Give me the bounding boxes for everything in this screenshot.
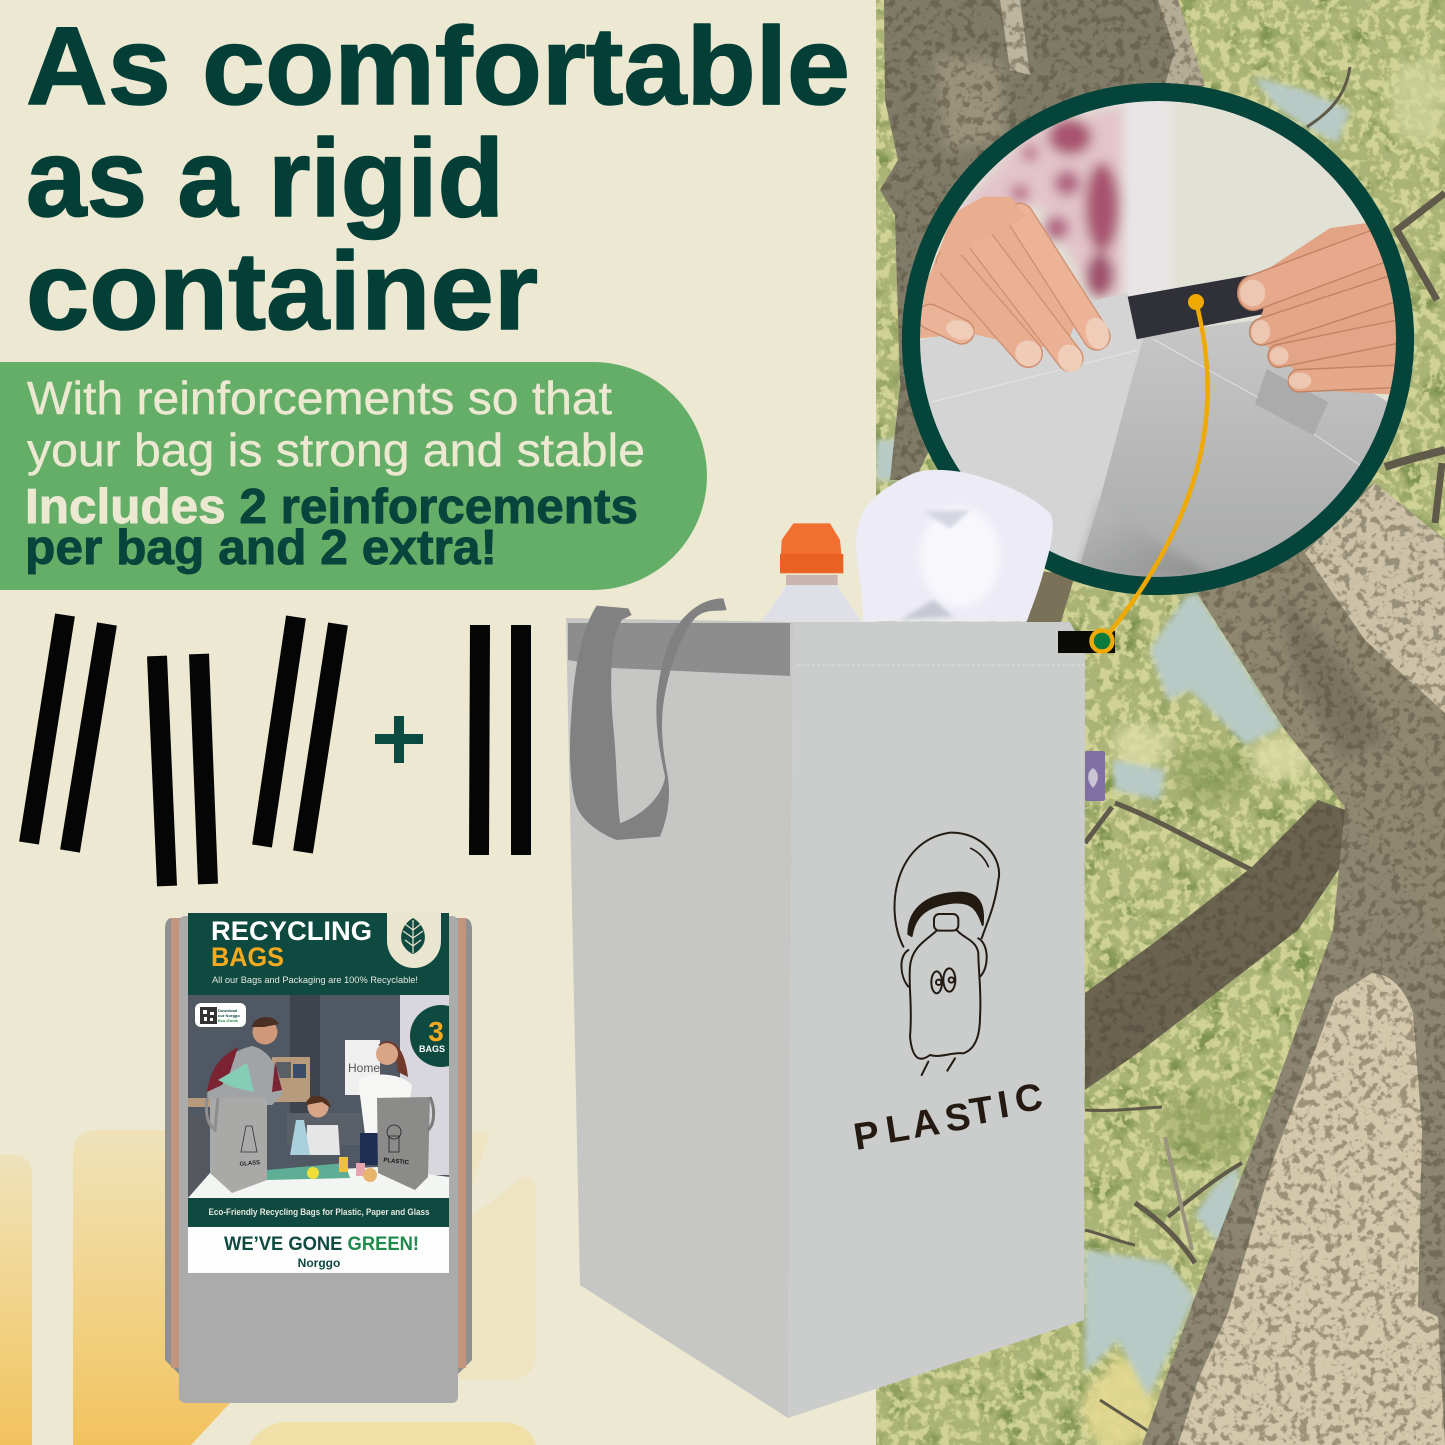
callout subtitle: your bag is strong and stable (27, 424, 645, 476)
eco band text: Eco-Friendly Recycling Bags for Plastic, Paper and Glass (208, 1207, 430, 1217)
qr card: Download (218, 1008, 238, 1013)
bottle with orange cap (762, 523, 862, 622)
table items (267, 1163, 350, 1180)
tag: purple brand (1085, 751, 1105, 801)
inner band (568, 623, 790, 676)
table (188, 1167, 449, 1198)
package label: All our Bags and Packaging are 100% Recyclable! (212, 975, 418, 985)
stitching (930, 339, 1360, 465)
badge: 3 bags (410, 1005, 449, 1067)
boy (306, 1125, 340, 1155)
small bag: plastic: PLASTIC (383, 1158, 410, 1166)
reinforcement tag on bag (1058, 631, 1115, 653)
badge: 3 bags: 3 (428, 1016, 444, 1047)
callout subtitle (27, 372, 645, 476)
bag side panel (566, 618, 793, 1418)
product package (165, 913, 472, 1403)
woman (358, 1075, 412, 1135)
foliage highlights (1084, 55, 1445, 1445)
reinforcement strap (1128, 274, 1267, 339)
arrow: callout connector (1092, 294, 1208, 652)
shelf (272, 1057, 310, 1102)
bag front panel (788, 622, 1085, 1418)
package gusset (165, 918, 472, 1403)
bag handle (570, 598, 727, 840)
callout emphasis text: per bag and 2 extra! (25, 521, 497, 575)
icon: plus sign (375, 716, 423, 763)
recycling bag (566, 598, 1105, 1418)
bark texture (876, 0, 1445, 1445)
bag interior right (1080, 320, 1388, 577)
home sign (345, 1040, 380, 1095)
package label (188, 913, 472, 1273)
bag label: plastic: PLASTIC (851, 1076, 1046, 1159)
qr card: our Norggo (218, 1013, 240, 1018)
trunk: diagonal main limb (1197, 483, 1445, 945)
bag interior left (920, 293, 1144, 564)
brand name: Norggo (298, 1256, 340, 1270)
badge: 3 bags: BAGS (419, 1044, 445, 1054)
decorative peach shapes (0, 1130, 536, 1445)
trunk: upper left (880, 0, 1205, 480)
green slogan: WE’VE GONE GREEN! (224, 1234, 419, 1255)
zoom lens (900, 92, 1407, 599)
qr card (195, 1003, 246, 1027)
right hand (1240, 219, 1397, 395)
callout emphasis text: Includes 2 reinforcements (25, 480, 638, 534)
eco band (188, 1198, 449, 1227)
green callout panel (0, 362, 707, 590)
callout emphasis text (25, 480, 638, 575)
small bag: glass (206, 1098, 267, 1193)
small bag: glass: GLASS (239, 1160, 260, 1168)
leaf tab (387, 913, 441, 968)
lower trunk light bark (1178, 973, 1445, 1445)
title (26, 5, 850, 353)
left hand (920, 197, 1112, 376)
reinforcement strips (29, 615, 521, 886)
sky patches (876, 77, 1350, 1397)
side branches (1085, 67, 1445, 1445)
ring outline (911, 92, 1405, 586)
icon: plastic bottle character (895, 833, 999, 1075)
package label: Home (348, 1061, 380, 1075)
small bag: plastic (377, 1097, 434, 1190)
title: container (26, 230, 538, 353)
sofa (188, 1117, 208, 1197)
lower trunk (1142, 807, 1445, 1445)
man (207, 1046, 282, 1105)
dark branch (1085, 800, 1345, 1090)
shirt pattern (950, 105, 1122, 300)
header text: RECYCLING (211, 916, 372, 946)
crumpled bottle (856, 470, 1053, 622)
lens photo (920, 101, 1396, 577)
icon: leaf (401, 918, 425, 954)
photo panel: tree background (876, 0, 1445, 1445)
velcro patch (1255, 369, 1328, 436)
qr card: Eco-Guide (218, 1018, 239, 1023)
package label: BAGS (211, 942, 284, 972)
package front (179, 916, 458, 1403)
title: as a rigid (26, 117, 504, 240)
callout subtitle: With reinforcements so that (27, 372, 612, 424)
title: As comfortable (26, 5, 850, 128)
